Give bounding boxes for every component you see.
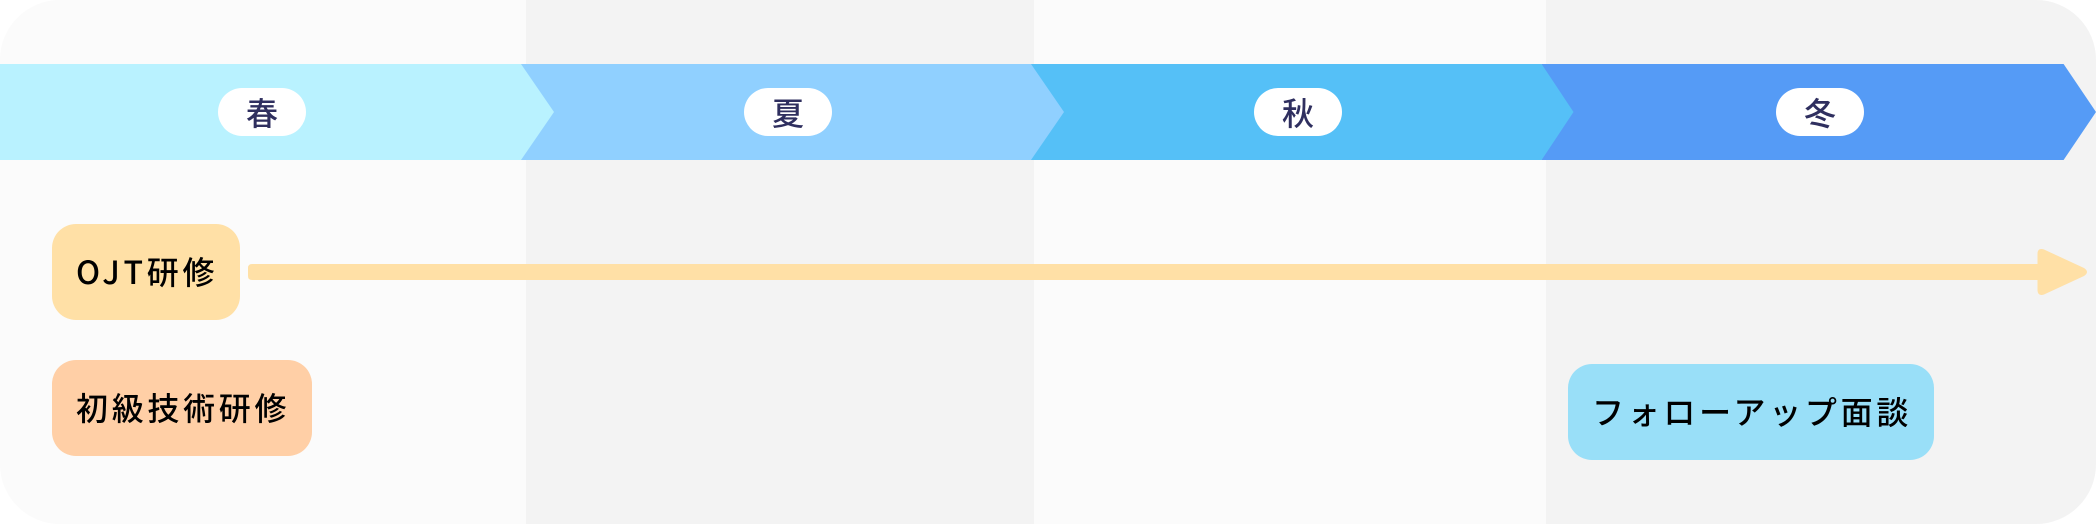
task: OJT training: OJT研修 bbox=[76, 248, 218, 294]
task: follow-up interview: フォローアップ面談 bbox=[1592, 388, 1912, 434]
season label: spring: 春 bbox=[246, 89, 278, 135]
chevron: spring bbox=[0, 64, 554, 160]
chevron: winter bbox=[1542, 64, 2096, 160]
season label: autumn bbox=[1254, 88, 1342, 136]
panel: spring column bbox=[0, 0, 526, 524]
chevron: summer bbox=[521, 64, 1064, 160]
task: basic technical training: 初級技術研修 bbox=[76, 384, 290, 430]
task: follow-up interview bbox=[1568, 364, 1934, 460]
task: OJT training bbox=[52, 224, 240, 320]
panel: summer column bbox=[526, 0, 1034, 524]
season label: winter bbox=[1776, 88, 1864, 136]
panel: winter column bbox=[1546, 0, 2096, 524]
panel: autumn column bbox=[1034, 0, 1546, 524]
arrow: OJT training duration bbox=[248, 249, 2087, 295]
season label: summer: 夏 bbox=[772, 89, 804, 135]
season label: autumn: 秋 bbox=[1282, 89, 1314, 135]
chevron: autumn bbox=[1031, 64, 1574, 160]
task: basic technical training bbox=[52, 360, 312, 456]
season label: winter: 冬 bbox=[1804, 89, 1836, 135]
season label: spring bbox=[218, 88, 306, 136]
season label: summer bbox=[744, 88, 832, 136]
